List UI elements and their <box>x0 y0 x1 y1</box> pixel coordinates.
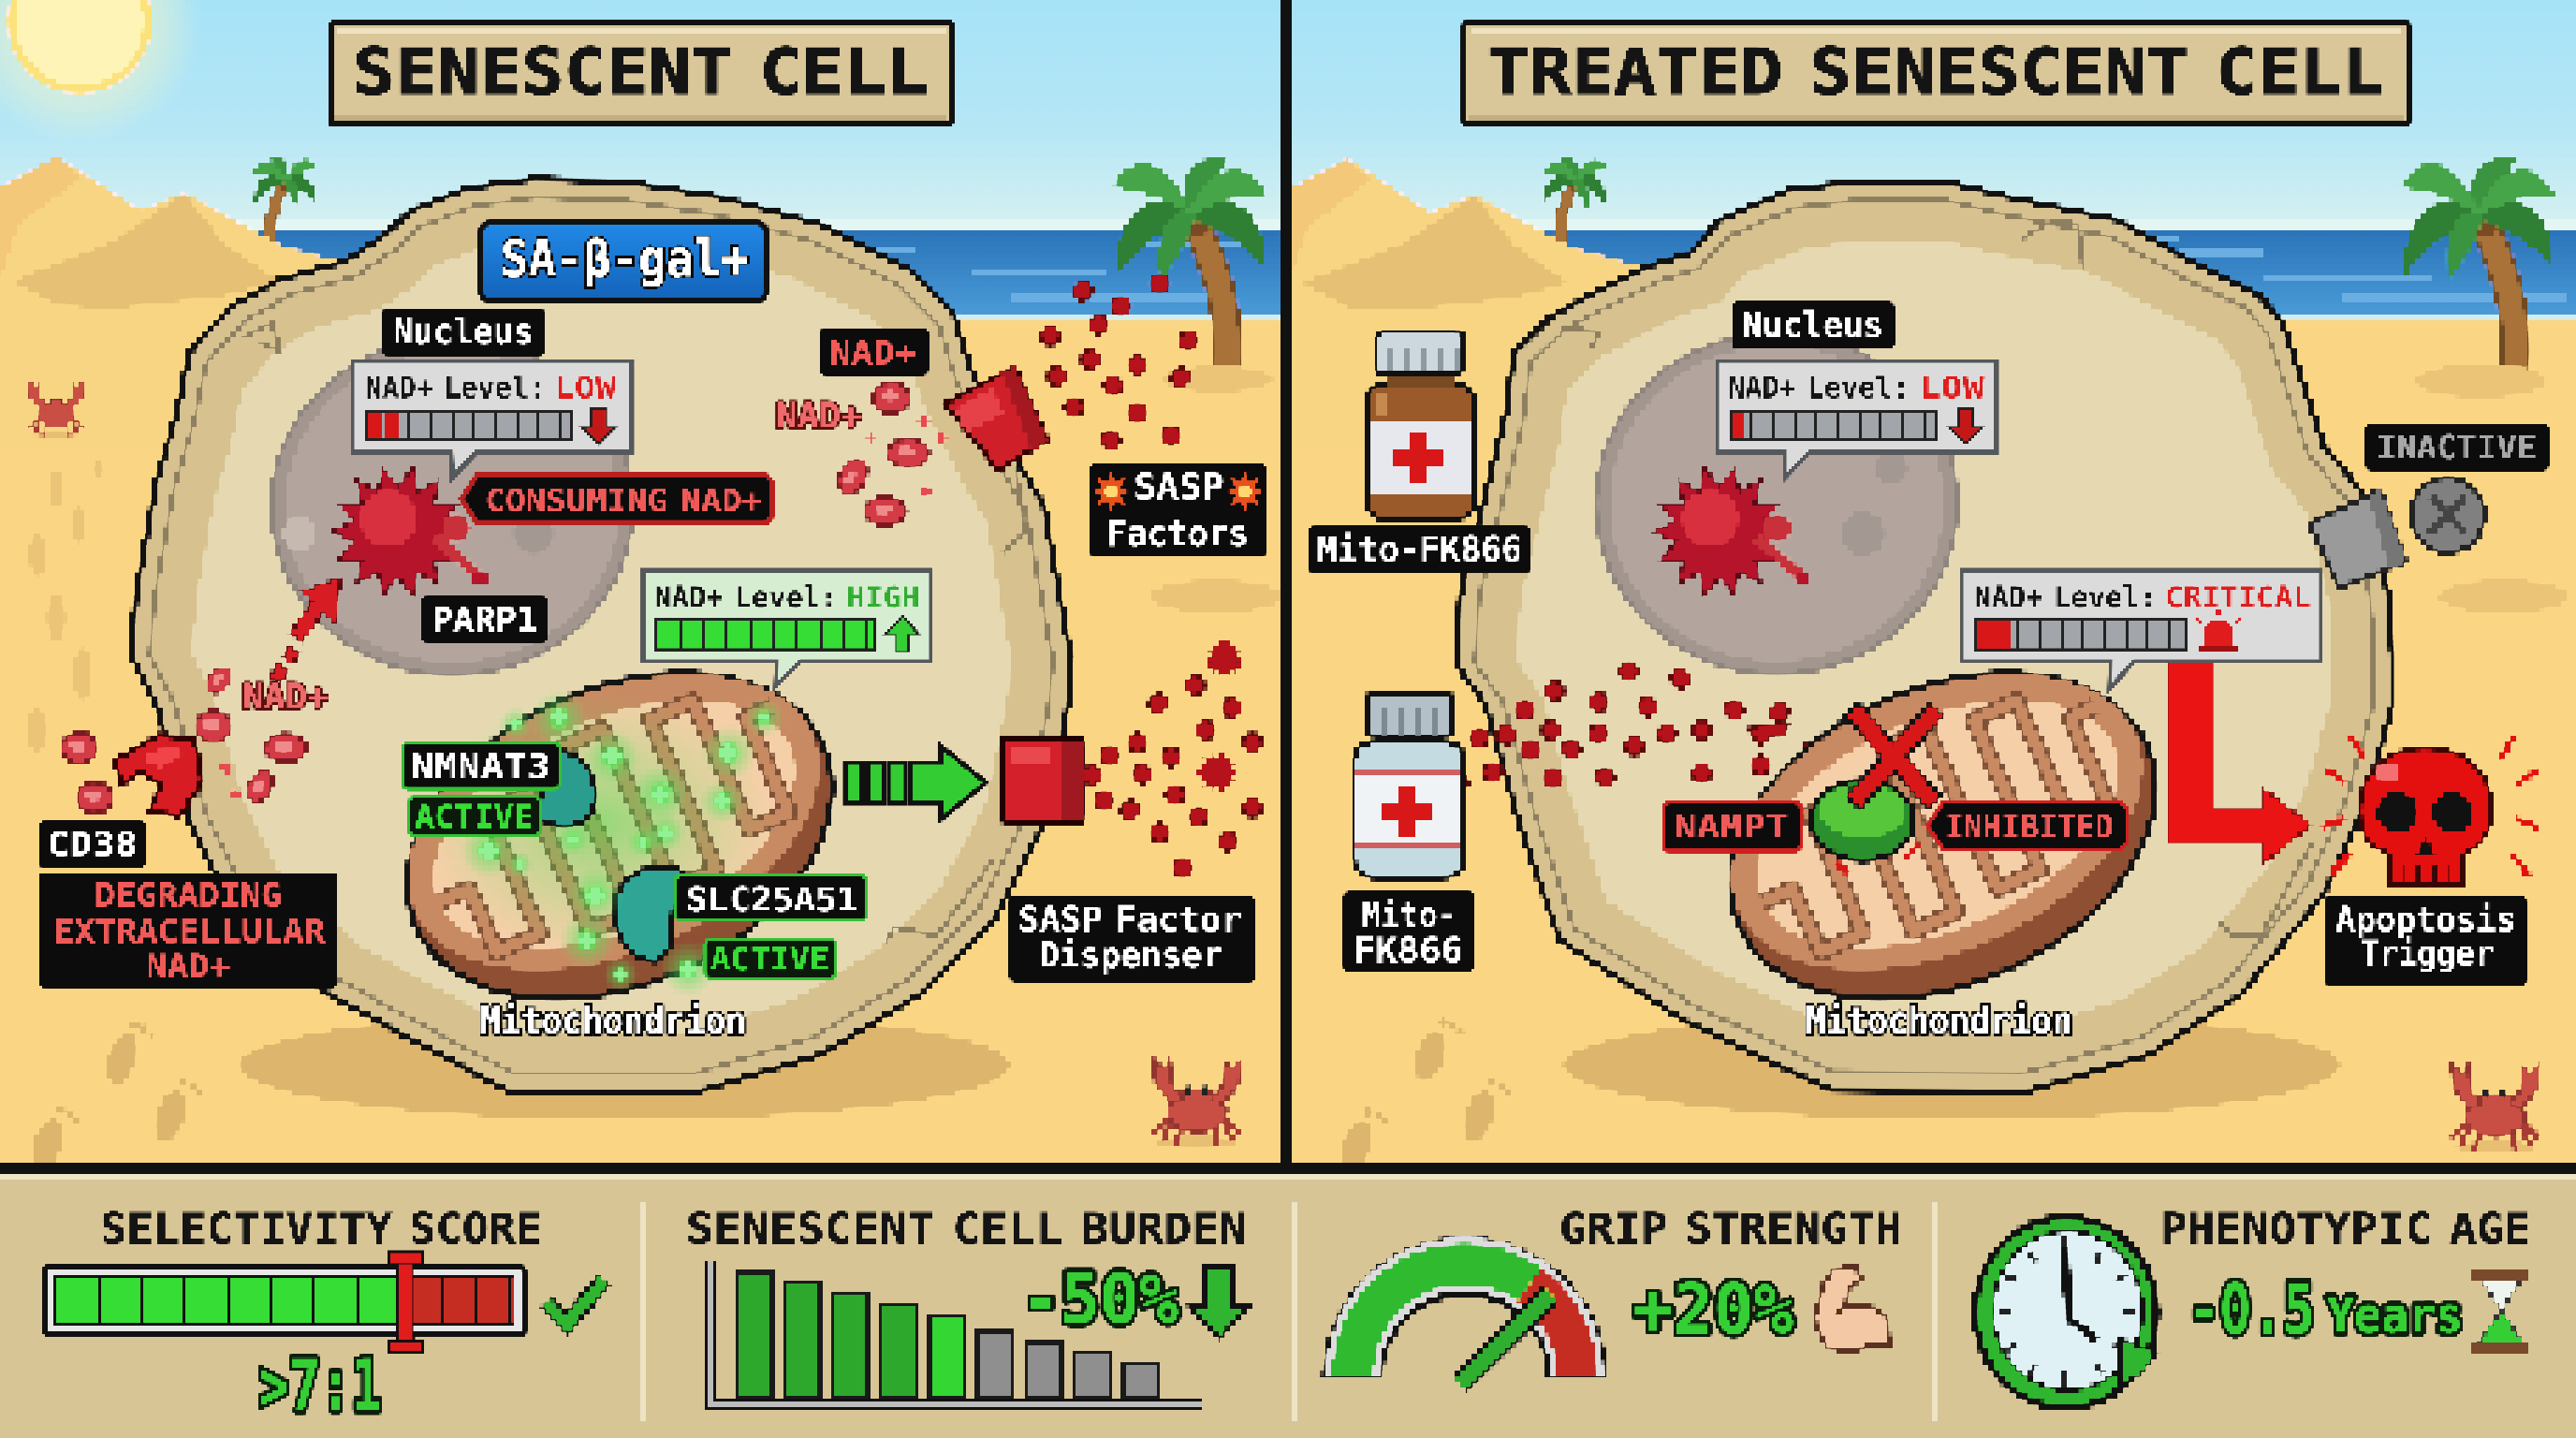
dunes left <box>0 156 393 449</box>
stat value: age change: -0.5 <box>2188 1269 2315 1350</box>
muscle arm icon <box>1814 1267 1889 1352</box>
glow over mitochondrion <box>426 693 772 955</box>
callout: NAD+ low treated: LOW <box>1919 370 1985 405</box>
label: NMNAT3: NMNAT3 <box>411 748 550 786</box>
vial: Mito-FK866 brown <box>1366 331 1475 519</box>
damage ticks <box>1835 843 1919 874</box>
stat value: age change: Years <box>2327 1288 2463 1344</box>
stat value: grip gain: +20% <box>1633 1269 1793 1350</box>
label: active SLC25A51: ACTIVE <box>710 941 829 978</box>
bottom stats bar background <box>0 1165 2576 1438</box>
green output arrow <box>846 746 986 819</box>
inactive grey channel <box>2309 490 2406 588</box>
callout: NAD+ low treated <box>1718 361 1996 477</box>
small palm right <box>1544 156 1608 248</box>
callout: NAD+ critical: NAD+ Level: <box>1974 580 2157 615</box>
label: degrading extracellular NAD+ <box>38 873 338 988</box>
inactive X icon <box>2411 477 2484 552</box>
label: active NMNAT3: ACTIVE <box>415 799 534 836</box>
cell membrane left <box>131 179 1072 1092</box>
CD38 enzyme <box>115 735 202 816</box>
PARP1 enzyme left <box>332 468 488 595</box>
skull rays <box>2321 736 2539 876</box>
red channel top right <box>944 367 1047 470</box>
label: SASP factor dispenser: SASP Factor <box>1018 900 1242 940</box>
SLC25A51 protein <box>615 866 683 961</box>
callout: consuming NAD+ <box>461 475 772 523</box>
NMNAT3 protein <box>534 751 595 827</box>
stat value: selectivity ratio: >7:1 <box>258 1343 382 1427</box>
footprints and crabs left <box>26 381 1241 1173</box>
extracellular NAD+ molecules <box>62 663 306 813</box>
skull <box>2360 748 2492 885</box>
hourglass <box>2471 1269 2530 1352</box>
check mark <box>546 1279 605 1324</box>
mitochondrion right <box>1679 610 2207 1062</box>
label: NAD+ top right: NAD+ <box>829 334 916 373</box>
callout: NAD+ low in nucleus: LOW <box>554 370 617 405</box>
label: Mito-FK866 brown: Mito-FK866 <box>1317 529 1522 570</box>
label: Mito-FK866 clear <box>1343 891 1474 972</box>
title: senescent cell <box>330 22 952 125</box>
sand marks <box>27 364 2569 753</box>
label: CD38: CD38 <box>47 826 138 864</box>
callout: NAD+ high in mitochondrion: HIGH <box>846 580 920 615</box>
stat heading: grip strength: GRIP STRENGTH <box>1559 1204 1902 1254</box>
label: PARP1 left: PARP1 <box>432 600 538 640</box>
SASP factor dots top right <box>1041 274 1198 449</box>
SA-beta-gal badge <box>481 223 766 301</box>
label: inhibited: INHIBITED <box>1945 809 2114 846</box>
nucleus right <box>1596 333 1957 674</box>
palm right panel <box>2400 157 2555 374</box>
label: degrading extracellular NAD+: DEGRADING <box>95 877 282 915</box>
label: apoptosis trigger <box>2324 896 2526 986</box>
PARP1 enzyme right <box>1654 468 1809 595</box>
label: mitochondrion right: Mitochondrion <box>1806 1000 2072 1043</box>
SASP factor dispenser channel <box>1001 738 1084 823</box>
callout: consuming NAD+: CONSUMING NAD+ <box>485 482 762 519</box>
selectivity bar <box>45 1253 524 1352</box>
callout: NAD+ low treated: NAD+ Level: <box>1728 370 1910 405</box>
label: nucleus right: Nucleus <box>1742 305 1883 345</box>
stat heading: selectivity score: SELECTIVITY SCORE <box>100 1204 542 1254</box>
label: SASP factors: Factors <box>1106 513 1249 554</box>
SASP dots lower right <box>1083 639 1262 877</box>
label: CD38 <box>38 821 146 868</box>
arrow into nucleus <box>270 578 341 683</box>
nucleus left <box>271 338 633 675</box>
cell membrane right <box>1456 182 2393 1092</box>
callout: NAD+ critical: CRITICAL <box>2165 580 2311 615</box>
burden bar chart <box>710 1262 1201 1404</box>
label: Mito-FK866 clear: Mito- <box>1362 895 1456 935</box>
floating NAD+ top: NAD+ <box>776 396 862 436</box>
label: Mito-FK866 clear: FK866 <box>1354 931 1463 971</box>
label: SASP factors: SASP <box>1134 466 1224 507</box>
label: NAMPT <box>1663 802 1801 851</box>
apoptosis arrow <box>2169 655 2311 865</box>
callout: NAD+ high in mitochondrion: NAD+ Level: <box>654 580 838 615</box>
vial: Mito-FK866 clear <box>1354 693 1465 877</box>
label: INACTIVE: INACTIVE <box>2377 429 2537 467</box>
red dots in treated cell <box>1450 662 1822 792</box>
label: NAD+ top right <box>820 328 929 375</box>
palm left panel <box>1112 157 1267 374</box>
label: NAMPT: NAMPT <box>1674 809 1789 846</box>
gauge chart <box>1353 1264 1577 1384</box>
cell shadow right <box>1563 1011 2340 1120</box>
NAD+ molecules top right <box>832 382 947 525</box>
small palm left <box>254 156 318 248</box>
label: NMNAT3 <box>402 742 560 789</box>
callout: NAD+ low in nucleus: NAD+ Level: <box>365 370 546 405</box>
label: apoptosis trigger: Trigger <box>2360 933 2494 974</box>
footprints and crab right <box>1335 1018 2539 1175</box>
stat value: burden reduction: -50% <box>1021 1259 1178 1340</box>
panel divider <box>1281 0 1293 1170</box>
label: SASP factor dispenser: Dispenser <box>1039 935 1222 976</box>
label: SASP factors <box>1090 463 1266 557</box>
floating NAD+ lower: NAD+ <box>242 677 329 717</box>
inhibition X <box>1858 716 1930 796</box>
callout: NAD+ critical <box>1962 571 2320 688</box>
label: SLC25A51: SLC25A51 <box>686 881 858 919</box>
title: treated senescent cell <box>1464 22 2408 125</box>
green sparkles <box>461 690 783 997</box>
label: SASP factor dispenser <box>1009 896 1255 982</box>
label: degrading extracellular NAD+: EXTRACELLULAR <box>53 914 326 951</box>
NAMPT enzyme <box>1811 780 1914 860</box>
stat value: age change <box>2188 1269 2463 1350</box>
stat heading: senescent cell burden: SENESCENT CELL BURDEN <box>686 1204 1247 1254</box>
callout: NAD+ high in mitochondrion <box>643 571 930 685</box>
down arrow green <box>1190 1267 1249 1339</box>
label: apoptosis trigger: Apoptosis <box>2335 900 2516 940</box>
label: degrading extracellular NAD+: NAD+ <box>146 948 230 986</box>
SA-beta-gal badge: SA-β-gal+ <box>501 229 749 288</box>
label: mitochondrion left: Mitochondrion <box>480 1000 746 1043</box>
mitochondrion left <box>356 610 884 1062</box>
sun <box>0 0 201 143</box>
stat heading: phenotypic age: PHENOTYPIC AGE <box>2160 1204 2531 1254</box>
label: nucleus left: Nucleus <box>393 312 534 352</box>
title: senescent cell: SENESCENT CELL <box>353 36 929 110</box>
dunes right <box>1290 158 1683 451</box>
title: treated senescent cell: TREATED SENESCENT CELL <box>1487 36 2384 110</box>
callout: NAD+ low in nucleus <box>353 361 631 477</box>
clock <box>1971 1213 2160 1412</box>
cell shadow left <box>239 1011 1010 1120</box>
